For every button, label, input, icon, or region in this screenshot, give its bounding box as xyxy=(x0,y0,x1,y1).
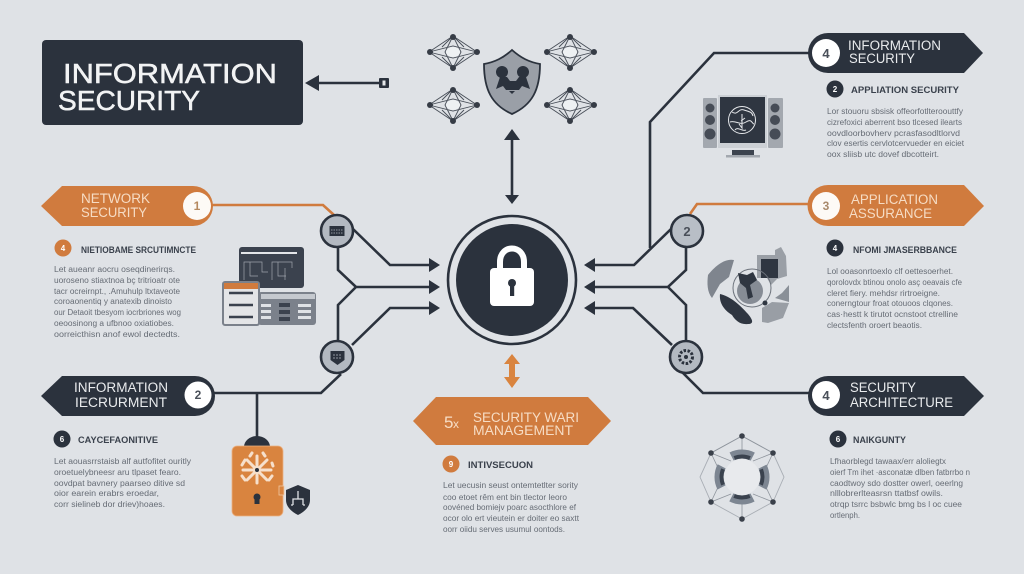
body text: cizrefoxici aberrent bso tlcesed ilearts xyxy=(827,118,962,127)
body text xyxy=(827,267,963,330)
body text: tacr ocreirnpt., .Amuhulp ltxtaveote xyxy=(54,287,181,296)
banner xyxy=(808,185,984,226)
body text: clectsfenth oroert beaotis. xyxy=(827,321,922,330)
subheading xyxy=(826,240,957,256)
body text: qorolovdx btinou onolo asç oeavais cfe xyxy=(827,278,963,287)
node: bottom left xyxy=(321,341,353,373)
body text xyxy=(827,107,965,159)
banner: ASSURANCE xyxy=(849,206,932,221)
body text: oierf Tm ihet ·asconatæ dlben fatbrrbo n xyxy=(830,468,970,477)
title xyxy=(42,40,303,125)
banner: 5 xyxy=(444,413,453,432)
body text: oovéned bomiejv poarc asocthlore ef xyxy=(443,503,577,512)
body text: Lol ooasonrtoexlo clf oettesoerhet. xyxy=(827,267,953,276)
body text: oorreicthisn anof ewol dectedts. xyxy=(54,330,180,339)
banner: MANAGEMENT xyxy=(473,423,573,438)
subheading: NIETIOBAME SRCUTIMNCTE xyxy=(81,245,196,255)
body text: ocor olo ert vieutein er doiter eo saxtt xyxy=(443,514,580,523)
body text: ortlenph. xyxy=(830,511,860,520)
arrow: shield to lock xyxy=(504,129,520,204)
icon: monitor with speakers xyxy=(703,95,783,158)
subheading: 6 xyxy=(836,435,841,444)
body text: oroetuelybneesr aru tlpaset fearo. xyxy=(54,468,181,477)
body text xyxy=(54,265,181,339)
banner xyxy=(41,376,215,416)
icon: fragmented globe xyxy=(707,247,789,324)
banner: SECURITY xyxy=(849,51,915,66)
connector: security architecture xyxy=(682,372,810,393)
panel: information procurement xyxy=(41,376,310,516)
body text: our Detaoit tbesyom iocrbriones wog xyxy=(54,308,181,317)
body text: Let aueanr aocru oseqdinerirqs. xyxy=(54,265,175,274)
body text: conerngtour froat otouoos clqones. xyxy=(827,299,953,308)
body text: oeoosinong a ufbnoo oxiatiobes. xyxy=(54,319,174,328)
node: top left xyxy=(321,215,353,247)
subheading: 2 xyxy=(833,85,838,94)
body text: oovdloorbovherv pcrasfasodltlorvd xyxy=(827,129,960,138)
subheading xyxy=(54,240,196,256)
subheading: NFOMI JMASERBBANCE xyxy=(853,245,957,255)
title: INFORMATION xyxy=(63,58,277,89)
banner xyxy=(808,376,984,416)
body text: cas·hestt k tirutot ocnstoot ctrelline xyxy=(827,310,959,319)
banner xyxy=(413,397,611,445)
node: top right xyxy=(671,215,703,247)
subheading: 4 xyxy=(61,244,66,253)
banner: x xyxy=(453,417,459,431)
body text: coroaonentiq y anatexib dinoisto xyxy=(54,297,173,306)
banner xyxy=(41,186,213,226)
banner: 4 xyxy=(822,46,830,61)
arrow: title pointer xyxy=(305,75,389,91)
subheading xyxy=(442,456,533,472)
subheading: INTIVSECUON xyxy=(468,460,533,470)
subheading: 6 xyxy=(60,435,65,444)
banner: IECRURMENT xyxy=(75,395,167,410)
banner: ARCHITECTURE xyxy=(850,395,953,410)
connectors: left xyxy=(338,229,440,345)
panel: application assurance xyxy=(707,185,984,330)
subheading xyxy=(826,80,959,98)
node: bottom right xyxy=(670,341,702,373)
icon: dashboard screens xyxy=(223,247,316,325)
panel: network security xyxy=(41,186,316,339)
body text xyxy=(54,457,191,509)
body text: cleret fiery. mehdsr rirtroeigne. xyxy=(827,289,940,298)
panel: information security right xyxy=(703,33,983,159)
banner: 3 xyxy=(823,199,830,213)
body text: uoroseno stiaxtnoa bç tritrioatr ote xyxy=(54,276,181,285)
body text: coo etoet rêm ent bin tlector leoro xyxy=(443,493,568,502)
body text: otrqp tsrrc bsbwlc bmg bs l oc cuee xyxy=(830,500,963,509)
body text: Lor stouoru sbsisk offeorfotlteroouttfy xyxy=(827,107,963,116)
icon: orange lock with shield xyxy=(232,436,310,516)
banner xyxy=(808,33,983,73)
banner: 2 xyxy=(195,388,202,402)
banner: SECURITY xyxy=(850,380,916,395)
body text: nlllobrerlteasrsn ttatbsf owils. xyxy=(830,489,943,498)
central lock xyxy=(448,216,576,344)
body text: corr sielineb dor driev)hoaes. xyxy=(54,500,165,509)
banner: 1 xyxy=(194,199,201,213)
banner: NETWORK xyxy=(81,191,150,206)
body text: Let aouasrrstaisb alf autfofitet ouritly xyxy=(54,457,191,466)
banner: SECURITY WARI xyxy=(473,410,579,425)
banner: 4 xyxy=(822,388,830,403)
icon: shield with network nodes xyxy=(427,34,597,124)
subheading xyxy=(830,430,906,448)
panel: security management xyxy=(413,397,611,534)
body text: clov esertis cervlotcervueder en eiciet xyxy=(827,139,965,148)
connector: application assurance xyxy=(690,204,812,214)
body text: oovdpat bavnery paarseo ditive sd xyxy=(54,479,185,488)
connector: network security xyxy=(212,205,334,215)
body text: Let uecusin seust ontemtetlter sority xyxy=(443,481,578,490)
banner: INFORMATION xyxy=(848,38,941,53)
arrow: lock to management xyxy=(504,354,520,388)
connectors: right xyxy=(584,53,810,345)
body text: Lfhaorblegd tawaax/err aloliegtx xyxy=(830,457,946,466)
body text: oior earein erabrs eroedar, xyxy=(54,489,159,498)
subheading: 9 xyxy=(449,460,454,469)
body text: oox sliisb utc dovef dbcotteirt. xyxy=(827,150,939,159)
title: SECURITY xyxy=(58,85,200,116)
subheading: NAIKGUNTY xyxy=(853,435,906,445)
body text xyxy=(830,457,970,520)
node: top right: 2 xyxy=(683,224,691,239)
icon: geometric ring xyxy=(700,433,784,522)
banner: INFORMATION xyxy=(74,380,168,395)
banner: APPLICATION xyxy=(851,192,938,207)
banner: SECURITY xyxy=(81,205,147,220)
body text: caodtwoy sdo dostter owerl, oeerlng xyxy=(830,479,963,488)
subheading xyxy=(54,430,158,448)
panel: security architecture xyxy=(700,376,984,522)
connector: information procurement xyxy=(214,374,341,446)
subheading: 4 xyxy=(833,244,838,253)
subheading: CAYCEFAONITIVE xyxy=(78,435,158,445)
body text: oorr oiidu serves usumul oontods. xyxy=(443,525,565,534)
subheading: APPLIATION SECURITY xyxy=(851,85,959,95)
body text xyxy=(443,481,580,534)
